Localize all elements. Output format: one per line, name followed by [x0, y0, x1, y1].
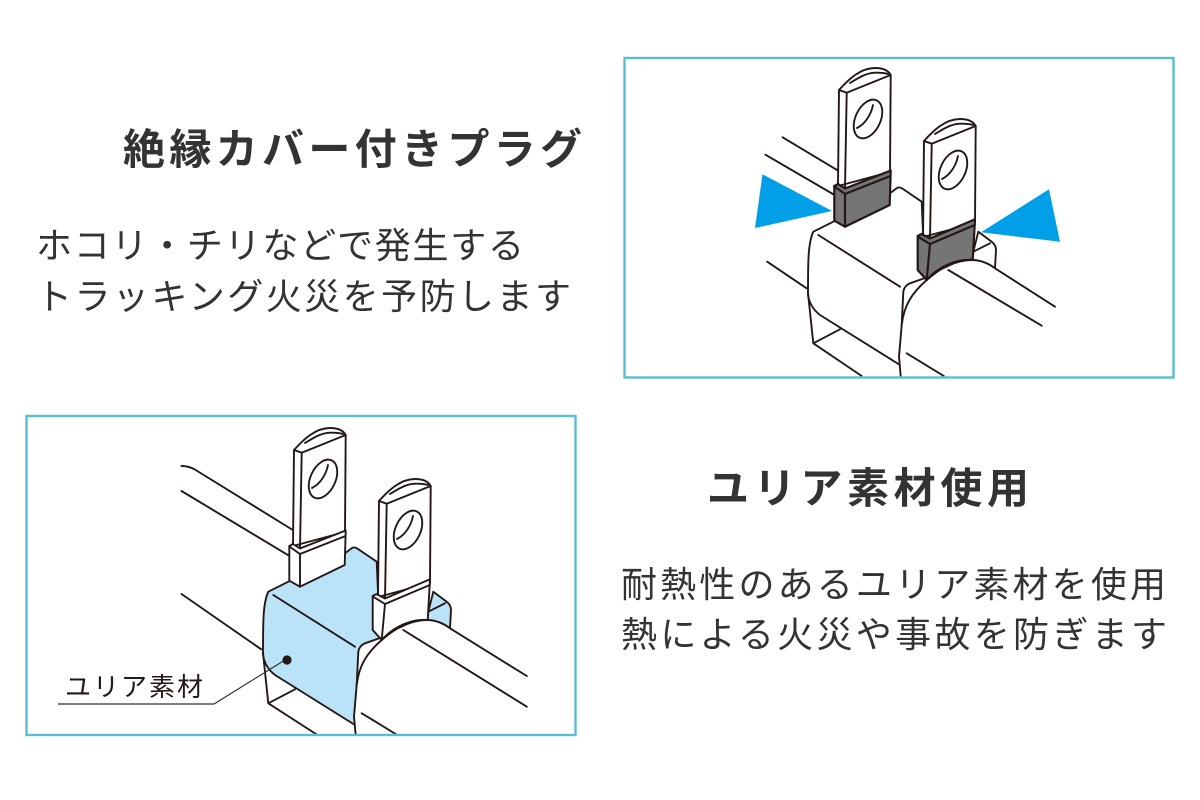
- text block: urea material description: 耐熱性のあるユリア素材を使用: [621, 564, 1166, 605]
- illustration: plug with dark insulated blades: [765, 68, 1071, 376]
- panel: urea material diagram: [26, 416, 576, 735]
- text block: insulated cover description: ホコリ・チリなどで発生する: [36, 225, 524, 266]
- panel: insulated cover plug diagram: [624, 58, 1174, 378]
- callout: urea material label: ユリア素材: [65, 672, 203, 702]
- text block: urea material description: [621, 564, 1167, 655]
- text block: insulated cover description: トラッキング火災を予防します: [36, 276, 571, 317]
- text block: urea material description: 熱による火災や事故を防ぎます: [621, 614, 1167, 655]
- heading: insulated cover plug: 絶縁カバー付きプラグ: [123, 126, 582, 173]
- arrow: left blue triangle: [755, 174, 832, 228]
- collar: left: [289, 530, 346, 587]
- collar: right: [373, 579, 430, 640]
- blade: right: [923, 119, 976, 239]
- arrow: right blue triangle: [981, 189, 1060, 242]
- blade: left: [293, 428, 346, 548]
- heading: urea material: ユリア素材使用: [707, 465, 1029, 512]
- collar: right insulated cover: [918, 219, 975, 280]
- callout: urea material label: [58, 655, 292, 704]
- blade: left: [838, 68, 891, 188]
- text block: insulated cover description: [36, 225, 571, 317]
- illustration: plug with blue urea body: [182, 428, 527, 735]
- blade: right: [378, 479, 431, 599]
- collar: left insulated cover: [834, 170, 891, 227]
